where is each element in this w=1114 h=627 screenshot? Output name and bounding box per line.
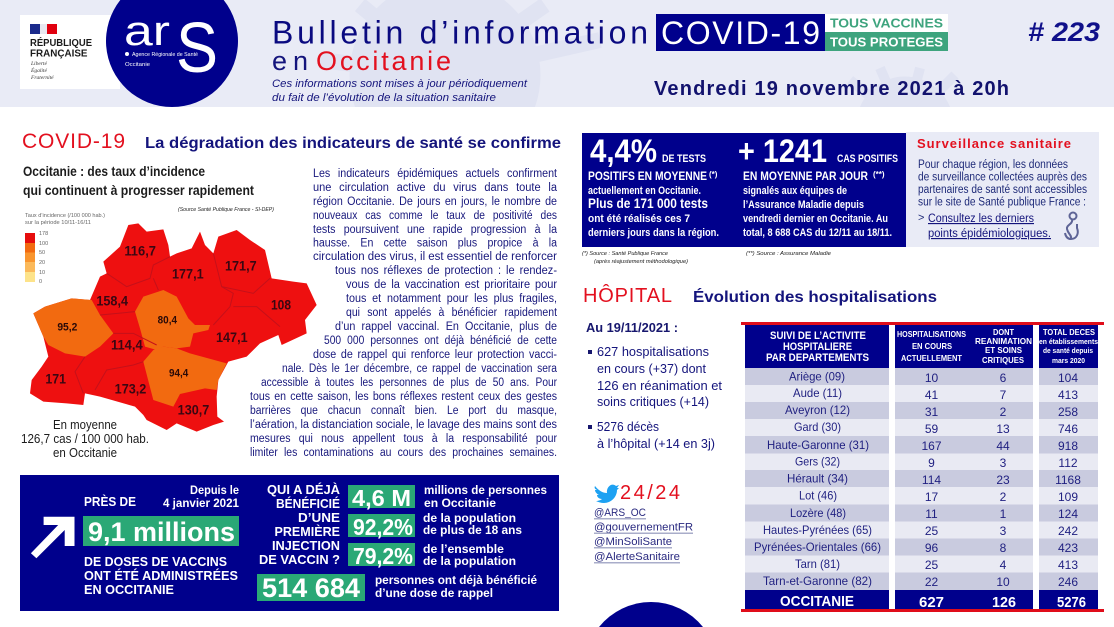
title [272,14,648,76]
row: Aveyron [785,403,1078,419]
row: Hérault [787,472,1081,487]
stat: 92,2%: 92,2% [353,514,413,540]
table header: EN COURS [912,341,952,351]
row: Occitanie total: 5276 [1057,594,1086,611]
row: Tarn: 4 [1000,558,1007,572]
map legend: 50 [39,250,45,256]
body text: qui sont appelés à bénéficier rapidement [346,307,558,319]
stat: daily positive cases: l’Assurance Maladie depuis [743,199,864,211]
body text: tests poursuivent une rapide progression à la [313,224,558,236]
panel: surveillance sanitaire: de surveillance collectées auprès des [918,172,1087,184]
row: Ariège: 6 [1000,371,1007,385]
row: Ariège [789,370,1078,385]
body text: nale. Dès le 1er décembre, ce rappel de vaccination sera [282,363,558,375]
table header: REANIMATION [975,336,1032,346]
incidence map of Occitanie [30,223,317,432]
stat: daily positive cases: (**) [873,170,885,179]
row: Pyrénées-Orientales [754,540,1078,555]
body text [250,168,558,459]
stat: 4,6 M: millions de personnes [424,483,547,497]
incidence map of Occitanie: 171 [45,371,66,387]
row: Aveyron: 31 [925,405,938,419]
twitter accounts: @gouvernementFR [594,522,693,534]
icon: twitter bird [595,485,619,503]
logo: République Française [20,15,120,89]
row: Occitanie total [745,590,1098,611]
row: Aude: 7 [1000,388,1007,402]
row: Gard [794,420,1078,436]
incidence map of Occitanie: 114,4 [111,336,143,352]
hospital summary: 126 en réanimation et [597,379,723,393]
map source: (Source Santé Publique France - SI-DEP) [178,207,274,213]
stat: positivity: 4,4% [590,133,657,169]
slogan: tous vaccinés tous protégés [825,14,948,51]
row: Haute-Garonne [767,438,1078,453]
panel: vaccination [20,475,559,611]
body text: accessible à toutes les personnes de plus de 50 ans. Pour [261,377,557,389]
logo: République Française: Fraternité [30,75,54,81]
hospital summary: soins critiques (+14) [597,395,709,409]
row: Haute-Garonne: 918 [1058,439,1078,453]
map heading [23,164,254,198]
body text: tous nos réflexes de protection : le rendez- [335,265,557,277]
table header: PAR DEPARTEMENTS [766,352,869,364]
stat: daily positive cases: CAS POSITIFS [837,153,898,165]
body text: circulation des virus, il est essentiel de renforcer [313,251,557,263]
incidence map of Occitanie: 95,2 [57,321,77,333]
date: Vendredi 19 novembre 2021 à 20h [654,78,1009,100]
doses administered: ONT ÉTÉ ADMINISTRÉES [84,568,238,583]
row: Pyrénées-Orientales: 8 [1000,541,1007,555]
body text: barrières que chacun connaît bien. Le port du masque, [250,405,557,417]
hospital summary: à l’hôpital (+14 en 3j) [597,437,715,451]
stat: 79,2%: de la population [423,554,516,568]
subtitle: Ces informations sont mises à jour périodiquement [272,78,528,90]
stat: positivity: Plus de 171 000 tests [588,196,708,211]
map average caption: 126,7 cas / 100 000 hab. [21,432,149,446]
row: Gard: 746 [1058,422,1078,436]
body text: Les indicateurs épidémiques actuels confirment [313,168,558,180]
row: Occitanie total: 627 [919,594,944,611]
incidence map of Occitanie: 147,1 [216,329,248,345]
logo: République Française: Égalité [30,66,47,74]
slogan: tous vaccinés tous protégés: TOUS VACCINES [830,16,943,30]
icon: info chain [1065,212,1078,239]
logo: ARS circle: ar [124,7,170,54]
table header: CRITIQUES [982,355,1024,365]
table row stripes [745,368,1098,590]
row: Aude: 413 [1058,388,1078,402]
row: Hérault: Hérault (34) [787,472,848,486]
body text: d’un rappel vaccinal. En Occitanie, plus de [335,321,557,333]
incidence map of Occitanie: 130,7 [178,401,210,417]
table header: ET SOINS [985,345,1022,355]
first injection question: DE VACCIN ? [259,552,340,567]
incidence map of Occitanie: 171,7 [225,257,257,273]
row: Lot [799,488,1078,504]
row: Ariège: 10 [925,371,938,385]
doses administered: Depuis le [190,485,239,497]
logo: ARS circle: Occitanie [125,62,150,68]
first injection question: BÉNÉFICIÉ [276,496,340,511]
map heading: qui continuent à progresser rapidement [23,183,254,198]
twitter accounts: @AlerteSanitaire [594,551,680,563]
title: Bulletin d’information [272,14,648,50]
issue number: # 223 [1028,17,1100,47]
footnotes: (*) Source : Santé Publique France [582,251,668,257]
first injection question [259,482,341,567]
row: Gard: 13 [996,422,1010,436]
heading: COVID-19 [22,130,561,153]
stat: 79,2% [348,542,516,569]
table header: TOTAL DECES [1043,327,1095,337]
stat: daily positive cases: vendredi dernier en Occitanie. Au [743,213,888,225]
incidence map of Occitanie: 177,1 [172,265,204,281]
row: Hautes-Pyrénées: 242 [1058,524,1078,538]
table header: SUIVI DE L’ACTIVITE [770,330,866,342]
COVID-19 banner: COVID-19 [661,15,820,51]
incidence map of Occitanie: 116,7 [124,243,156,259]
row: Tarn-et-Garonne: 10 [996,575,1010,589]
row: Gard: Gard (30) [794,420,841,434]
table header: ACTUELLEMENT [901,353,963,363]
row: Haute-Garonne: 44 [996,439,1010,453]
heading: hôpital: HÔPITAL [583,284,672,307]
panel: surveillance sanitaire: Consultez les derniers [928,213,1034,225]
map average caption: En moyenne [53,418,117,432]
hospital summary: 627 hospitalisations [597,345,709,359]
twitter accounts: 24/24 [620,482,680,504]
footnotes: (**) Source : Assurance Maladie [746,251,831,257]
row: Lot: 17 [925,490,938,504]
row: Tarn-et-Garonne: 246 [1058,575,1078,589]
stat: daily positive cases [738,133,898,239]
body text: hausse. En cette saison plus propice à la [313,238,558,250]
footnotes: (après réajustement méthodologique) [594,259,688,265]
row: Haute-Garonne: 167 [921,439,942,453]
subtitle [272,78,528,104]
row: Hautes-Pyrénées [763,523,1078,538]
body text: région Occitanie. De jours en jours, le nombre de [313,196,557,208]
hospital summary [586,321,723,451]
panel: test positivity and cases [582,133,906,247]
row: Gers [795,454,1078,470]
stat: daily positive cases: EN MOYENNE PAR JOUR [743,169,868,183]
map legend: 20 [39,260,45,266]
row: Lozère: 11 [925,507,938,521]
body text: mesures qui nous appellent tous à la responsabilité pour [250,433,557,445]
map legend: 178 [39,231,48,237]
table header [745,325,1098,368]
incidence map of Occitanie: 173,2 [115,380,147,396]
row: Aveyron: 258 [1058,405,1078,419]
panel: surveillance sanitaire [906,132,1099,247]
map legend: sur la période 10/11-16/11 [25,220,91,226]
stat: booster doses [257,573,537,603]
hospital table [741,322,1104,612]
logo: ARS circle [106,0,238,107]
title: en [272,46,308,76]
stat: 4,6 M [348,483,547,511]
table header: en établissements [1039,337,1098,346]
row: Aveyron: 2 [1000,405,1007,419]
row: Tarn: Tarn (81) [795,557,840,571]
map legend: Taux d’incidence (/100 000 hab.) [25,213,105,219]
stat: 4,6 M: en Occitanie [424,496,496,510]
stat: 4,6 M: 4,6 M [352,485,411,511]
header band [0,0,1114,107]
row: Gard: 59 [925,422,938,436]
heading: COVID-19: COVID-19 [22,130,125,153]
table header: mars 2020 [1052,356,1085,365]
row: Hérault: 23 [996,473,1010,487]
table header: HOSPITALIERE [783,341,852,353]
body text: 500 000 personnes ont déjà bénéficié de cette [324,335,557,347]
logo: ARS circle: S [176,9,218,88]
doses administered: 4 janvier 2021 [163,498,240,510]
map heading: Occitanie : des taux d’incidence [23,164,205,179]
panel: surveillance sanitaire: partenaires de santé sont accessibles [918,184,1087,196]
body text: tous en cette saison, les bons réflexes restent ceux des gestes [250,391,557,403]
row: Hautes-Pyrénées: 25 [925,524,938,538]
row: Ariège: Ariège (09) [789,370,845,384]
row: Occitanie total: OCCITANIE [780,593,854,610]
stat: positivity [588,133,719,239]
logo: République Française: Liberté [30,61,47,67]
doses administered: 9,1 millions [88,517,235,547]
row: Lozère: 124 [1058,507,1078,521]
first injection question: QUI A DÉJÀ [267,482,341,497]
table header: DONT [993,327,1015,337]
body text: une circulation active du virus dans toute la [313,182,558,194]
doses administered [83,485,240,597]
icon: rising arrow [31,517,74,558]
row: Gers: 3 [1000,456,1007,470]
body text: tous et notamment pour les plus fragiles, [346,293,557,305]
heading: COVID-19: La dégradation des indicateurs de santé se confirme [145,135,561,152]
incidence map of Occitanie: 108 [271,296,291,312]
stat: booster doses: 514 684 [262,573,360,603]
title: Occitanie [316,46,451,76]
first injection question: D’UNE [298,510,340,525]
twitter accounts [594,482,693,564]
table header: HOSPITALISATIONS [897,329,966,339]
row: Pyrénées-Orientales: 423 [1058,541,1078,555]
row: Haute-Garonne: Haute-Garonne (31) [767,438,869,452]
stat: 79,2%: de l’ensemble [423,542,504,556]
row: Tarn: 413 [1058,558,1078,572]
row: Tarn: 25 [925,558,938,572]
stat: booster doses: d’une dose de rappel [375,586,493,600]
stat: positivity: ont été réalisés ces 7 [588,213,690,225]
panel: surveillance sanitaire: Pour chaque région, les données [918,159,1068,171]
hospital summary: 5276 décès [597,420,659,434]
doses administered: EN OCCITANIE [84,582,174,597]
panel: surveillance sanitaire: sur le site de Santé publique France : [918,196,1086,208]
row: Occitanie total: 126 [992,594,1016,611]
body text: l’aération, la distanciation sociale, le lavage des mains sont des [250,419,557,431]
map average caption [21,418,149,460]
doses administered: DE DOSES DE VACCINS [84,554,227,569]
stat: daily positive cases: + 1241 [738,133,827,169]
stat: positivity: derniers jours dans la région. [588,227,719,239]
map average caption: en Occitanie [53,446,117,460]
map legend: 10 [39,270,45,276]
hospital summary: en cours (+37) dont [597,362,707,376]
row: Gers: Gers (32) [795,454,840,468]
map legend [25,213,105,285]
row: Tarn-et-Garonne: 22 [925,575,938,589]
map legend: 100 [39,241,48,247]
logo: République Française: FRANÇAISE [30,48,88,60]
stat: 92,2%: de plus de 18 ans [423,523,522,537]
row: Gers: 112 [1058,456,1078,470]
map legend: 0 [39,279,42,285]
slogan: tous vaccinés tous protégés: TOUS PROTEGES [830,34,943,50]
stat: daily positive cases: signalés aux équipes de [743,185,847,197]
first injection question: INJECTION [272,538,340,553]
incidence map of Occitanie: 158,4 [96,292,128,308]
subtitle: du fait de l’évolution de la situation sanitaire [272,92,496,104]
row: Aude [793,386,1078,402]
row: Lozère [790,506,1078,521]
body text: vous de la vaccination est prioritaire pour [346,279,557,291]
row: Hérault: 1168 [1055,473,1081,487]
row: Lozère: 1 [1000,507,1007,521]
row: Lot: 2 [1000,490,1007,504]
twitter accounts: @MinSoliSante [594,536,672,548]
heading: hôpital: Évolution des hospitalisations [693,287,937,306]
row: Pyrénées-Orientales: Pyrénées-Orientales (66) [754,540,881,554]
incidence map of Occitanie: 94,4 [169,367,189,379]
row: Tarn-et-Garonne [763,574,1078,589]
stat: 92,2% [348,511,522,540]
body text: limiter les contaminations au cours des prochaines semaines. [250,447,557,459]
row: Gers: 9 [928,456,935,470]
body text: nouveaux cas comme le taux de positivité des [313,210,557,222]
panel: surveillance sanitaire: > [918,212,924,224]
incidence map of Occitanie: 80,4 [158,315,178,327]
panel: surveillance sanitaire: Surveillance sanitaire [917,136,1071,151]
stat: booster doses: personnes ont déjà bénéficié [375,573,537,587]
twitter accounts: @ARS_OC [594,507,646,519]
table header: de santé depuis [1043,346,1093,355]
logo: ARS circle: Agence Régionale de Santé [132,52,198,58]
stat: 79,2%: 79,2% [353,543,413,569]
row: Lozère: Lozère (48) [790,506,846,520]
row: Aude: 41 [925,388,938,402]
panel: surveillance sanitaire: points épidémiologiques. [928,228,1051,240]
stat: daily positive cases: total, 8 688 CAS du 12/11 au 18/11. [743,227,892,239]
footnotes [582,251,831,265]
stat: 92,2%: de la population [423,511,516,525]
row: Aude: Aude (11) [793,386,842,400]
bottom circle [599,602,703,627]
row: Hérault: 114 [922,473,941,487]
stat: positivity: POSITIFS EN MOYENNE [588,169,707,183]
stat: positivity: actuellement en Occitanie. [588,185,701,197]
body text: dose de rappel qui renforce leur protection vacci- [313,349,557,361]
stat: positivity: (*) [709,170,718,179]
logo: République Française: RÉPUBLIQUE [30,36,92,49]
row: Ariège: 104 [1058,371,1078,385]
first injection question: PREMIÈRE [274,524,340,539]
stat: positivity: DE TESTS [662,153,706,165]
row: Aveyron: Aveyron (12) [785,403,850,417]
hospital summary: Au 19/11/2021 : [586,321,678,335]
row: Tarn [795,557,1078,572]
row: Lot: 109 [1058,490,1078,504]
row: Pyrénées-Orientales: 96 [925,541,938,555]
row: Hautes-Pyrénées: 3 [1000,524,1007,538]
heading: hôpital [583,284,937,307]
doses administered: PRÈS DE [84,494,136,509]
row: Lot: Lot (46) [799,488,837,502]
row: Hautes-Pyrénées: Hautes-Pyrénées (65) [763,523,872,537]
row: Tarn-et-Garonne: Tarn-et-Garonne (82) [763,574,872,588]
